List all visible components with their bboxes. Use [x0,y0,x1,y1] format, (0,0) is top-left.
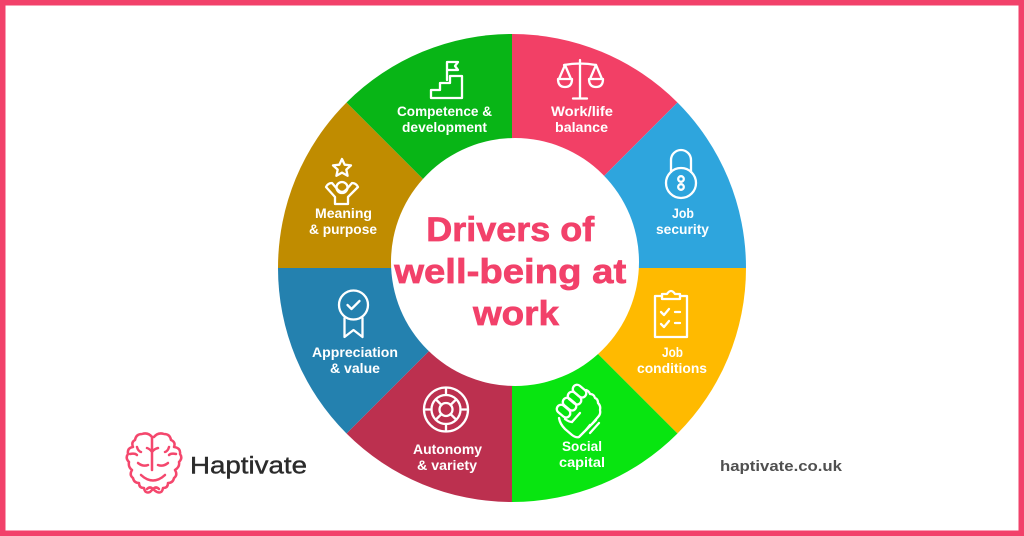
label: meaning and purpose: & purpose [309,222,377,237]
title: work [472,295,560,333]
segment: work/life balance [512,34,678,268]
icon: radial wheel [424,388,468,432]
website address: haptivate.co.uk [720,458,843,475]
centre circle [391,138,639,386]
segment: appreciation and value [278,268,512,434]
icon: stairs with flag [431,62,462,98]
segment: competence and development [346,34,512,268]
label: meaning and purpose: Meaning [315,206,372,221]
label: job conditions: conditions [637,361,707,376]
icon: award ribbon [339,290,368,337]
label: autonomy and variety: Autonomy [413,442,483,457]
title: Drivers of [426,211,595,249]
icon: balance scales [558,60,603,98]
label: competence and development: Competence & [397,104,492,119]
label: job conditions: Job [662,345,683,360]
label: work/life balance: balance [555,120,609,135]
label: work/life balance: Work/life [551,104,614,119]
label: job security: Job [672,206,694,221]
label: autonomy and variety: & variety [417,458,478,473]
segment: job security [512,102,746,268]
icon: person reaching for star [326,159,358,204]
label: social capital: capital [559,455,605,470]
segment: social capital [512,268,678,502]
segment: autonomy and variety [346,268,512,502]
wordmark: Haptivate [190,452,307,480]
logo: Haptivate [127,433,307,492]
label: appreciation and value: Appreciation [312,345,398,360]
label: competence and development: development [402,120,488,135]
label: job security: security [656,222,710,237]
icon: checklist clipboard [655,291,687,337]
title: well-being at [393,253,627,291]
segment: job conditions [512,268,746,434]
label: appreciation and value: & value [330,361,381,376]
segment: meaning and purpose [278,102,512,268]
icon: smiling brain [127,433,181,492]
label: social capital: Social [562,439,602,454]
donut wheel [278,34,746,502]
icon: padlock [666,150,696,198]
icon: clasped hands [555,383,600,437]
